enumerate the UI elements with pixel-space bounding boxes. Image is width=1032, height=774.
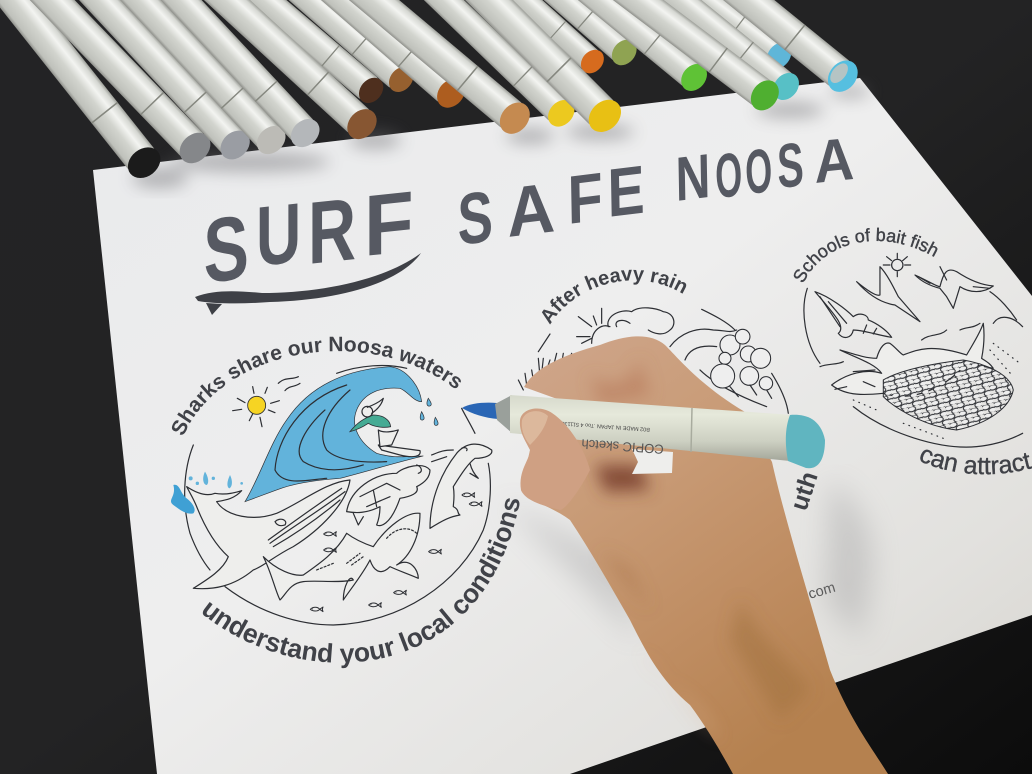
title word: NOOSA bbox=[675, 126, 855, 214]
title word: SURF: R bbox=[308, 179, 356, 283]
title word: NOOSA: S bbox=[776, 130, 805, 202]
icon: tiger shark bbox=[263, 513, 420, 600]
icon: wave bbox=[245, 367, 423, 502]
marker: grey C5 bbox=[0, 0, 217, 169]
icon: hills bbox=[670, 329, 767, 407]
circle outline bbox=[538, 309, 788, 413]
marker: dark brown bbox=[152, 0, 388, 108]
text: web address fragment: .com bbox=[803, 580, 837, 604]
icon: sun bbox=[233, 387, 279, 427]
text: understand your local conditions: understand your local conditions bbox=[202, 498, 520, 668]
heading: sharks share our Noosa waters: Sharks share our Noosa waters bbox=[172, 336, 461, 435]
icon: sun and clouds bbox=[577, 308, 610, 343]
title word: SAFE: A bbox=[505, 169, 556, 252]
hand: fingers, back of hand and wrist bbox=[521, 336, 888, 774]
hand shading bbox=[590, 360, 810, 740]
panel: after heavy rain bbox=[518, 270, 837, 604]
title word: SAFE: E bbox=[607, 152, 645, 232]
title word: SAFE: S bbox=[457, 176, 494, 261]
pen label: B02 MADE IN JAPAN .Too 4 511138 bbox=[561, 420, 650, 432]
marker: orange bbox=[403, 0, 609, 78]
icon: humpback whale bbox=[187, 480, 350, 589]
icon: sea turtle bbox=[347, 466, 430, 526]
marker: olive bbox=[417, 0, 642, 70]
pen nib bbox=[462, 403, 498, 419]
thumb nail bbox=[522, 411, 548, 445]
icon: surfer bbox=[350, 398, 420, 457]
panel: schools of bait fish bbox=[794, 228, 1032, 475]
marker: orange brown bbox=[217, 0, 471, 113]
title word: SURF: U bbox=[256, 185, 301, 284]
icon: shark bbox=[832, 323, 993, 396]
pen barrel bbox=[510, 395, 792, 461]
thumb bbox=[520, 409, 590, 510]
heading: schools of bait fish: Schools of bait fish bbox=[794, 228, 938, 282]
title word: SURF bbox=[203, 173, 414, 302]
marker: light green bbox=[471, 0, 712, 96]
shadows cast by the hand bbox=[500, 480, 872, 640]
text: south fragment: uth bbox=[785, 468, 824, 514]
marker: light blue bbox=[583, 0, 864, 98]
title word: SURF: F bbox=[364, 173, 414, 275]
title word: NOOSA: N bbox=[675, 140, 711, 214]
title word: SAFE bbox=[457, 152, 645, 261]
icon: bait fish school bbox=[883, 360, 1013, 430]
marker: neutral N3 bbox=[57, 0, 291, 160]
marker: tan bbox=[259, 0, 536, 140]
marker: grey C3 bbox=[91, 0, 325, 153]
title word: NOOSA: O bbox=[744, 134, 773, 208]
marker: light brown bbox=[183, 0, 418, 97]
surfboard swoosh bbox=[195, 253, 421, 315]
pen cap: blue end bbox=[786, 415, 825, 468]
marker: black 110 bbox=[0, 0, 167, 184]
illustration: rain catchment bbox=[518, 308, 788, 413]
text: can attract: can attract bbox=[920, 450, 1032, 475]
marker: teal bbox=[562, 0, 804, 105]
pen: Copic marker in use: COPIC sketch bbox=[581, 436, 664, 457]
illustration: sea life in circle bbox=[171, 366, 492, 625]
marker: bright yellow bbox=[354, 0, 628, 139]
illustration: shark, birds and bait ball bbox=[804, 253, 1023, 447]
circle outline bbox=[804, 288, 1023, 447]
hand holding pen bbox=[462, 336, 888, 774]
title: SURF SAFE NOOSA bbox=[195, 126, 855, 315]
marker: brown E57 bbox=[123, 0, 383, 145]
title word: NOOSA: A bbox=[813, 126, 855, 197]
marker pens row bbox=[0, 0, 864, 184]
pen: Copic marker in use bbox=[462, 395, 825, 468]
icon: surface splash bbox=[820, 317, 1023, 367]
icon: trees bbox=[711, 329, 773, 390]
icon: whale tail splash bbox=[171, 485, 195, 514]
icon: dolphin bbox=[430, 444, 492, 528]
panel: sharks share our waters bbox=[171, 336, 520, 668]
icon: birds bbox=[278, 377, 300, 391]
icon: scattered bubbles bbox=[853, 343, 1020, 438]
title word: NOOSA: O bbox=[714, 138, 743, 212]
title word: SURF: S bbox=[203, 195, 250, 302]
title word: SAFE: F bbox=[567, 159, 603, 239]
icon: sun bbox=[883, 253, 911, 277]
gap between pen and hand bbox=[632, 449, 673, 474]
icons: small fish bbox=[310, 493, 482, 612]
heading: after heavy rain: After heavy rain bbox=[542, 270, 686, 324]
marker: grey C4 bbox=[16, 0, 256, 165]
pen grip bbox=[495, 395, 512, 433]
marker shadows on paper bbox=[132, 86, 870, 188]
icon: water drops bbox=[420, 398, 438, 425]
icon: grass bbox=[518, 353, 572, 390]
marker: green bbox=[513, 0, 785, 116]
icon: flying birds bbox=[815, 267, 993, 337]
marker: yellow bbox=[352, 0, 580, 132]
marker: sky blue bbox=[561, 0, 796, 73]
circle outline bbox=[185, 366, 490, 625]
